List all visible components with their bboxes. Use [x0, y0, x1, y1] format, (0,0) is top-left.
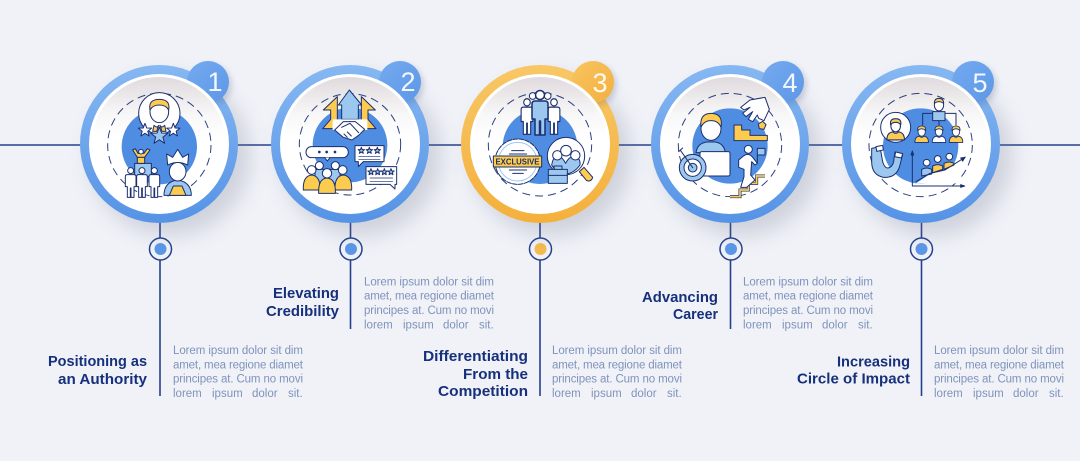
ring 4	[651, 65, 821, 236]
text 4: dolor	[822, 319, 848, 331]
badge 1: 1	[207, 67, 223, 97]
text 2: dolor	[443, 319, 469, 331]
text 5: Lorem ipsum dolor sit dim	[934, 345, 1064, 357]
title 3: From the	[463, 366, 528, 383]
ring 3	[461, 65, 631, 236]
text 2: Lorem ipsum dolor sit dim	[364, 276, 494, 288]
title 4: Advancing	[642, 289, 718, 306]
icon: impact	[869, 93, 972, 197]
node 2	[340, 238, 362, 260]
text 2: amet, mea regione diamet	[364, 290, 495, 302]
title 3: Differentiating	[423, 348, 528, 365]
disc 3	[470, 74, 610, 214]
title 5: Increasing	[837, 354, 910, 370]
disc 5	[851, 74, 991, 214]
panel: step 3	[423, 61, 683, 400]
text 5: dolor	[1013, 388, 1039, 400]
badge 4: 4	[782, 68, 798, 98]
text 5: sit.	[1049, 388, 1064, 400]
ring 1	[80, 65, 250, 236]
text 3: sit.	[667, 388, 682, 400]
title 1: Positioning as	[48, 353, 147, 370]
text 3: principes at. Cum no movi	[552, 374, 682, 386]
badge word: EXCLUSIVE	[495, 157, 540, 167]
text 1: principes at. Cum no movi	[173, 374, 303, 386]
panel: step 1	[48, 61, 304, 400]
title 1: an Authority	[58, 371, 148, 388]
icon: credibility	[299, 90, 401, 195]
text 4: amet, mea regione diamet	[743, 290, 874, 302]
badge 1	[187, 61, 232, 106]
disc 1	[89, 74, 229, 214]
connector 3	[539, 222, 541, 396]
badge 5	[952, 61, 997, 106]
icon: authority	[108, 93, 211, 197]
title 5: Circle of Impact	[797, 370, 910, 388]
text 5: ipsum	[973, 388, 1004, 400]
title 2: Credibility	[266, 303, 340, 320]
text 4: lorem	[743, 319, 772, 331]
text 2: lorem	[364, 319, 393, 331]
node 3	[530, 238, 552, 260]
title 4: Career	[673, 306, 718, 323]
text 4: principes at. Cum no movi	[743, 305, 873, 317]
panel: step 5	[797, 61, 1065, 400]
panel: step 4	[642, 61, 874, 331]
text 3: dolor	[631, 388, 657, 400]
badge 3: 3	[592, 68, 608, 98]
badge 2: 2	[400, 67, 416, 97]
text 5: lorem	[934, 388, 963, 400]
disc 2	[280, 74, 420, 214]
badge 4	[762, 61, 807, 106]
text 3: amet, mea regione diamet	[552, 359, 683, 371]
ring 5	[842, 65, 1012, 236]
title 2: Elevating	[273, 285, 339, 302]
connector 4	[730, 222, 732, 329]
text 5: principes at. Cum no movi	[934, 374, 1064, 386]
text 2: sit.	[479, 319, 494, 331]
text 1: sit.	[288, 388, 303, 400]
node 5	[910, 238, 932, 260]
text 2: ipsum	[403, 319, 434, 331]
connector 2	[350, 222, 352, 329]
text 3: lorem	[552, 388, 581, 400]
text 5: amet, mea regione diamet	[934, 359, 1065, 371]
text 1: Lorem ipsum dolor sit dim	[173, 345, 303, 357]
text 1: ipsum	[212, 388, 243, 400]
panel: step 2	[266, 61, 495, 331]
text 2: principes at. Cum no movi	[364, 305, 494, 317]
timeline	[0, 144, 1080, 146]
text 3: Lorem ipsum dolor sit dim	[552, 345, 682, 357]
badge 5: 5	[972, 68, 988, 98]
text 1: dolor	[252, 388, 278, 400]
badge 3	[572, 61, 617, 106]
badge 2	[379, 61, 424, 106]
title 3: Competition	[438, 383, 528, 400]
text 4: Lorem ipsum dolor sit dim	[743, 276, 873, 288]
connector 5	[920, 222, 922, 396]
node 4	[720, 238, 742, 260]
text 4: sit.	[858, 319, 873, 331]
node 1	[150, 238, 172, 260]
connector 1	[159, 222, 161, 396]
icon: career	[678, 93, 782, 197]
ring 2	[271, 65, 441, 236]
disc 4	[660, 74, 800, 214]
text 4: ipsum	[782, 319, 813, 331]
icon: differentiating	[488, 90, 593, 196]
text 1: amet, mea regione diamet	[173, 359, 304, 371]
text 3: ipsum	[591, 388, 622, 400]
text 1: lorem	[173, 388, 202, 400]
